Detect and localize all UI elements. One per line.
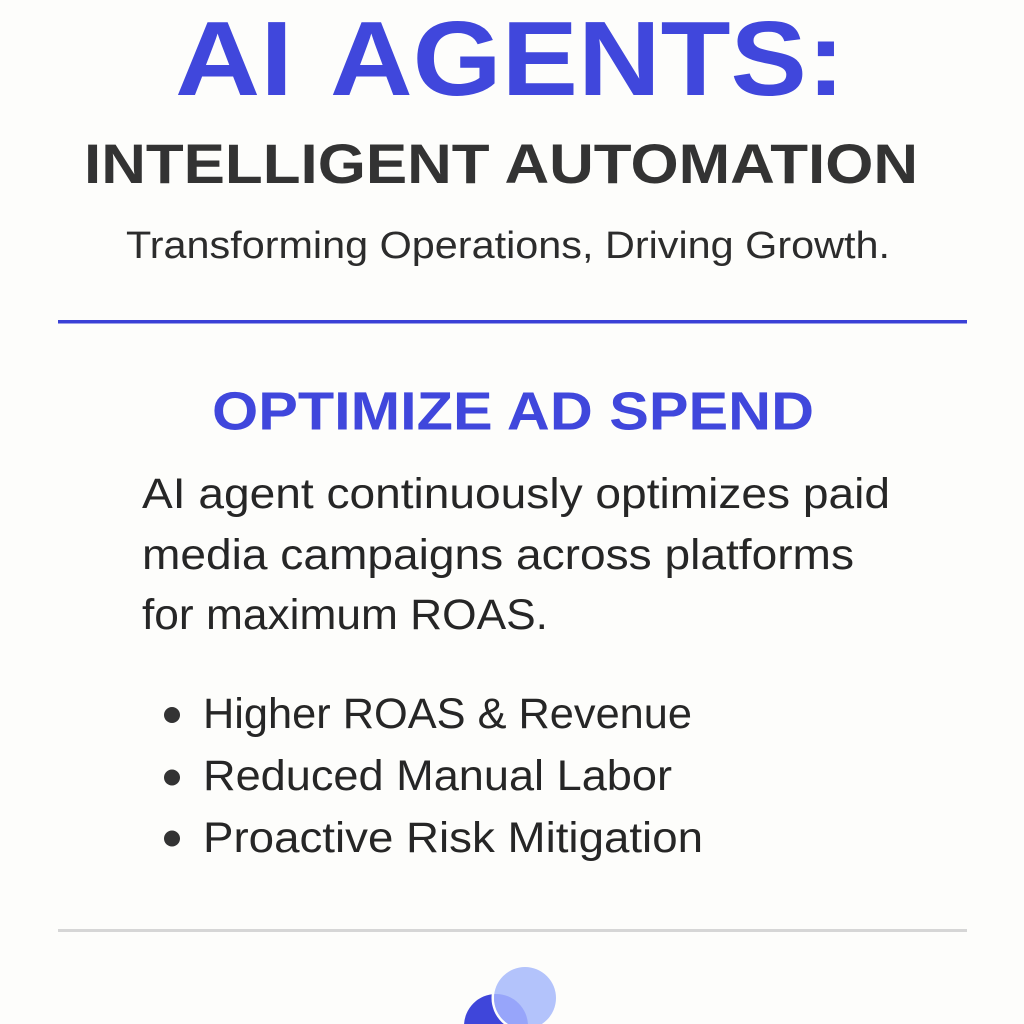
description text block: media campaigns across platforms (142, 531, 854, 579)
description text block: AI agent continuously optimizes paid (142, 470, 890, 518)
benefits list (164, 690, 703, 862)
tagline: Transforming Operations, Driving Growth. (126, 225, 890, 267)
description text block (142, 470, 890, 639)
title: AI (175, 0, 293, 118)
subtitle heading: INTELLIGENT AUTOMATION (84, 132, 918, 195)
bullet: reduced labor: Reduced Manual Labor (203, 752, 672, 800)
icon: overlapping circles logo (464, 964, 558, 1024)
bullet: higher ROAS: Higher ROAS & Revenue (203, 690, 692, 738)
bullet: risk mitigation: Proactive Risk Mitigation (203, 814, 703, 862)
description text block: for maximum ROAS. (142, 591, 548, 639)
section heading: OPTIMIZE AD SPEND (212, 382, 814, 442)
title: AGENTS: (330, 0, 845, 118)
